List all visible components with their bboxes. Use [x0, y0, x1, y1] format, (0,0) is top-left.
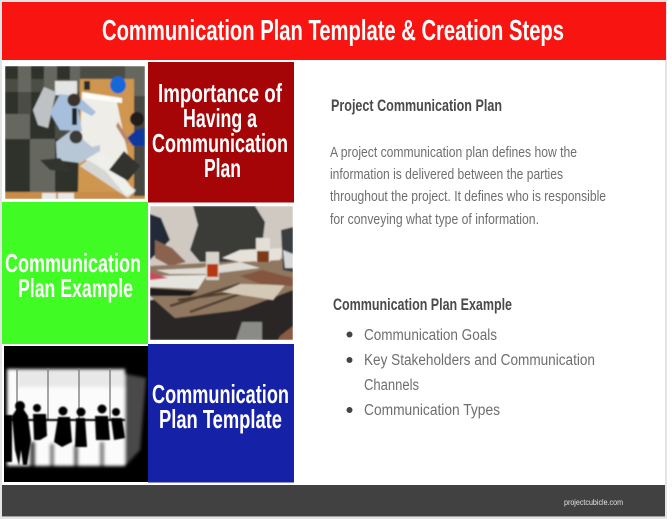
bullet list: Communication Goals [364, 327, 497, 344]
bullet list [346, 327, 595, 419]
panel heading [152, 78, 288, 183]
man two [56, 130, 100, 163]
paragraph: information is delivered between the parties [330, 166, 563, 183]
chair [33, 87, 56, 128]
panel heading: Communication [152, 128, 288, 158]
panel: importance [148, 62, 294, 202]
paragraph: throughout the project. It defines who is responsible [330, 188, 606, 205]
photo: silhouettes at a window [4, 346, 148, 482]
panel heading [5, 248, 141, 303]
panel heading: Plan [204, 153, 241, 183]
man one [50, 94, 96, 131]
blueprint rolls [82, 92, 122, 103]
footer url: projectcubicle.com [564, 498, 623, 507]
panel heading [152, 379, 289, 434]
panel heading: Communication [5, 248, 141, 278]
paragraph [330, 144, 606, 228]
bullet list: Key Stakeholders and Communication [364, 352, 595, 369]
panel heading: Importance of [158, 78, 282, 108]
section heading: Communication Plan Example [333, 295, 512, 314]
panel heading: Having a [183, 103, 257, 133]
photo: team meeting seen from above [5, 66, 145, 199]
text block: project communication plan [330, 96, 606, 228]
paragraph: for conveying what type of information. [330, 211, 539, 228]
section heading: Project Communication Plan [331, 96, 502, 115]
panel heading: Plan Template [159, 404, 282, 434]
panel heading: Communication [152, 379, 289, 409]
panel: example [2, 202, 148, 344]
panel: template [148, 344, 294, 482]
panel heading: Plan Example [18, 273, 133, 303]
header banner [2, 2, 666, 60]
laptop [109, 151, 140, 181]
photo: people at a wooden table [150, 206, 293, 340]
bullet list: Channels [364, 377, 419, 394]
text block: communication plan example [333, 295, 595, 419]
footer bar [2, 485, 665, 516]
woman [130, 112, 144, 126]
helmet [110, 76, 126, 94]
bullet list: Communication Types [364, 402, 500, 419]
paragraph: A project communication plan defines how the [330, 144, 577, 161]
